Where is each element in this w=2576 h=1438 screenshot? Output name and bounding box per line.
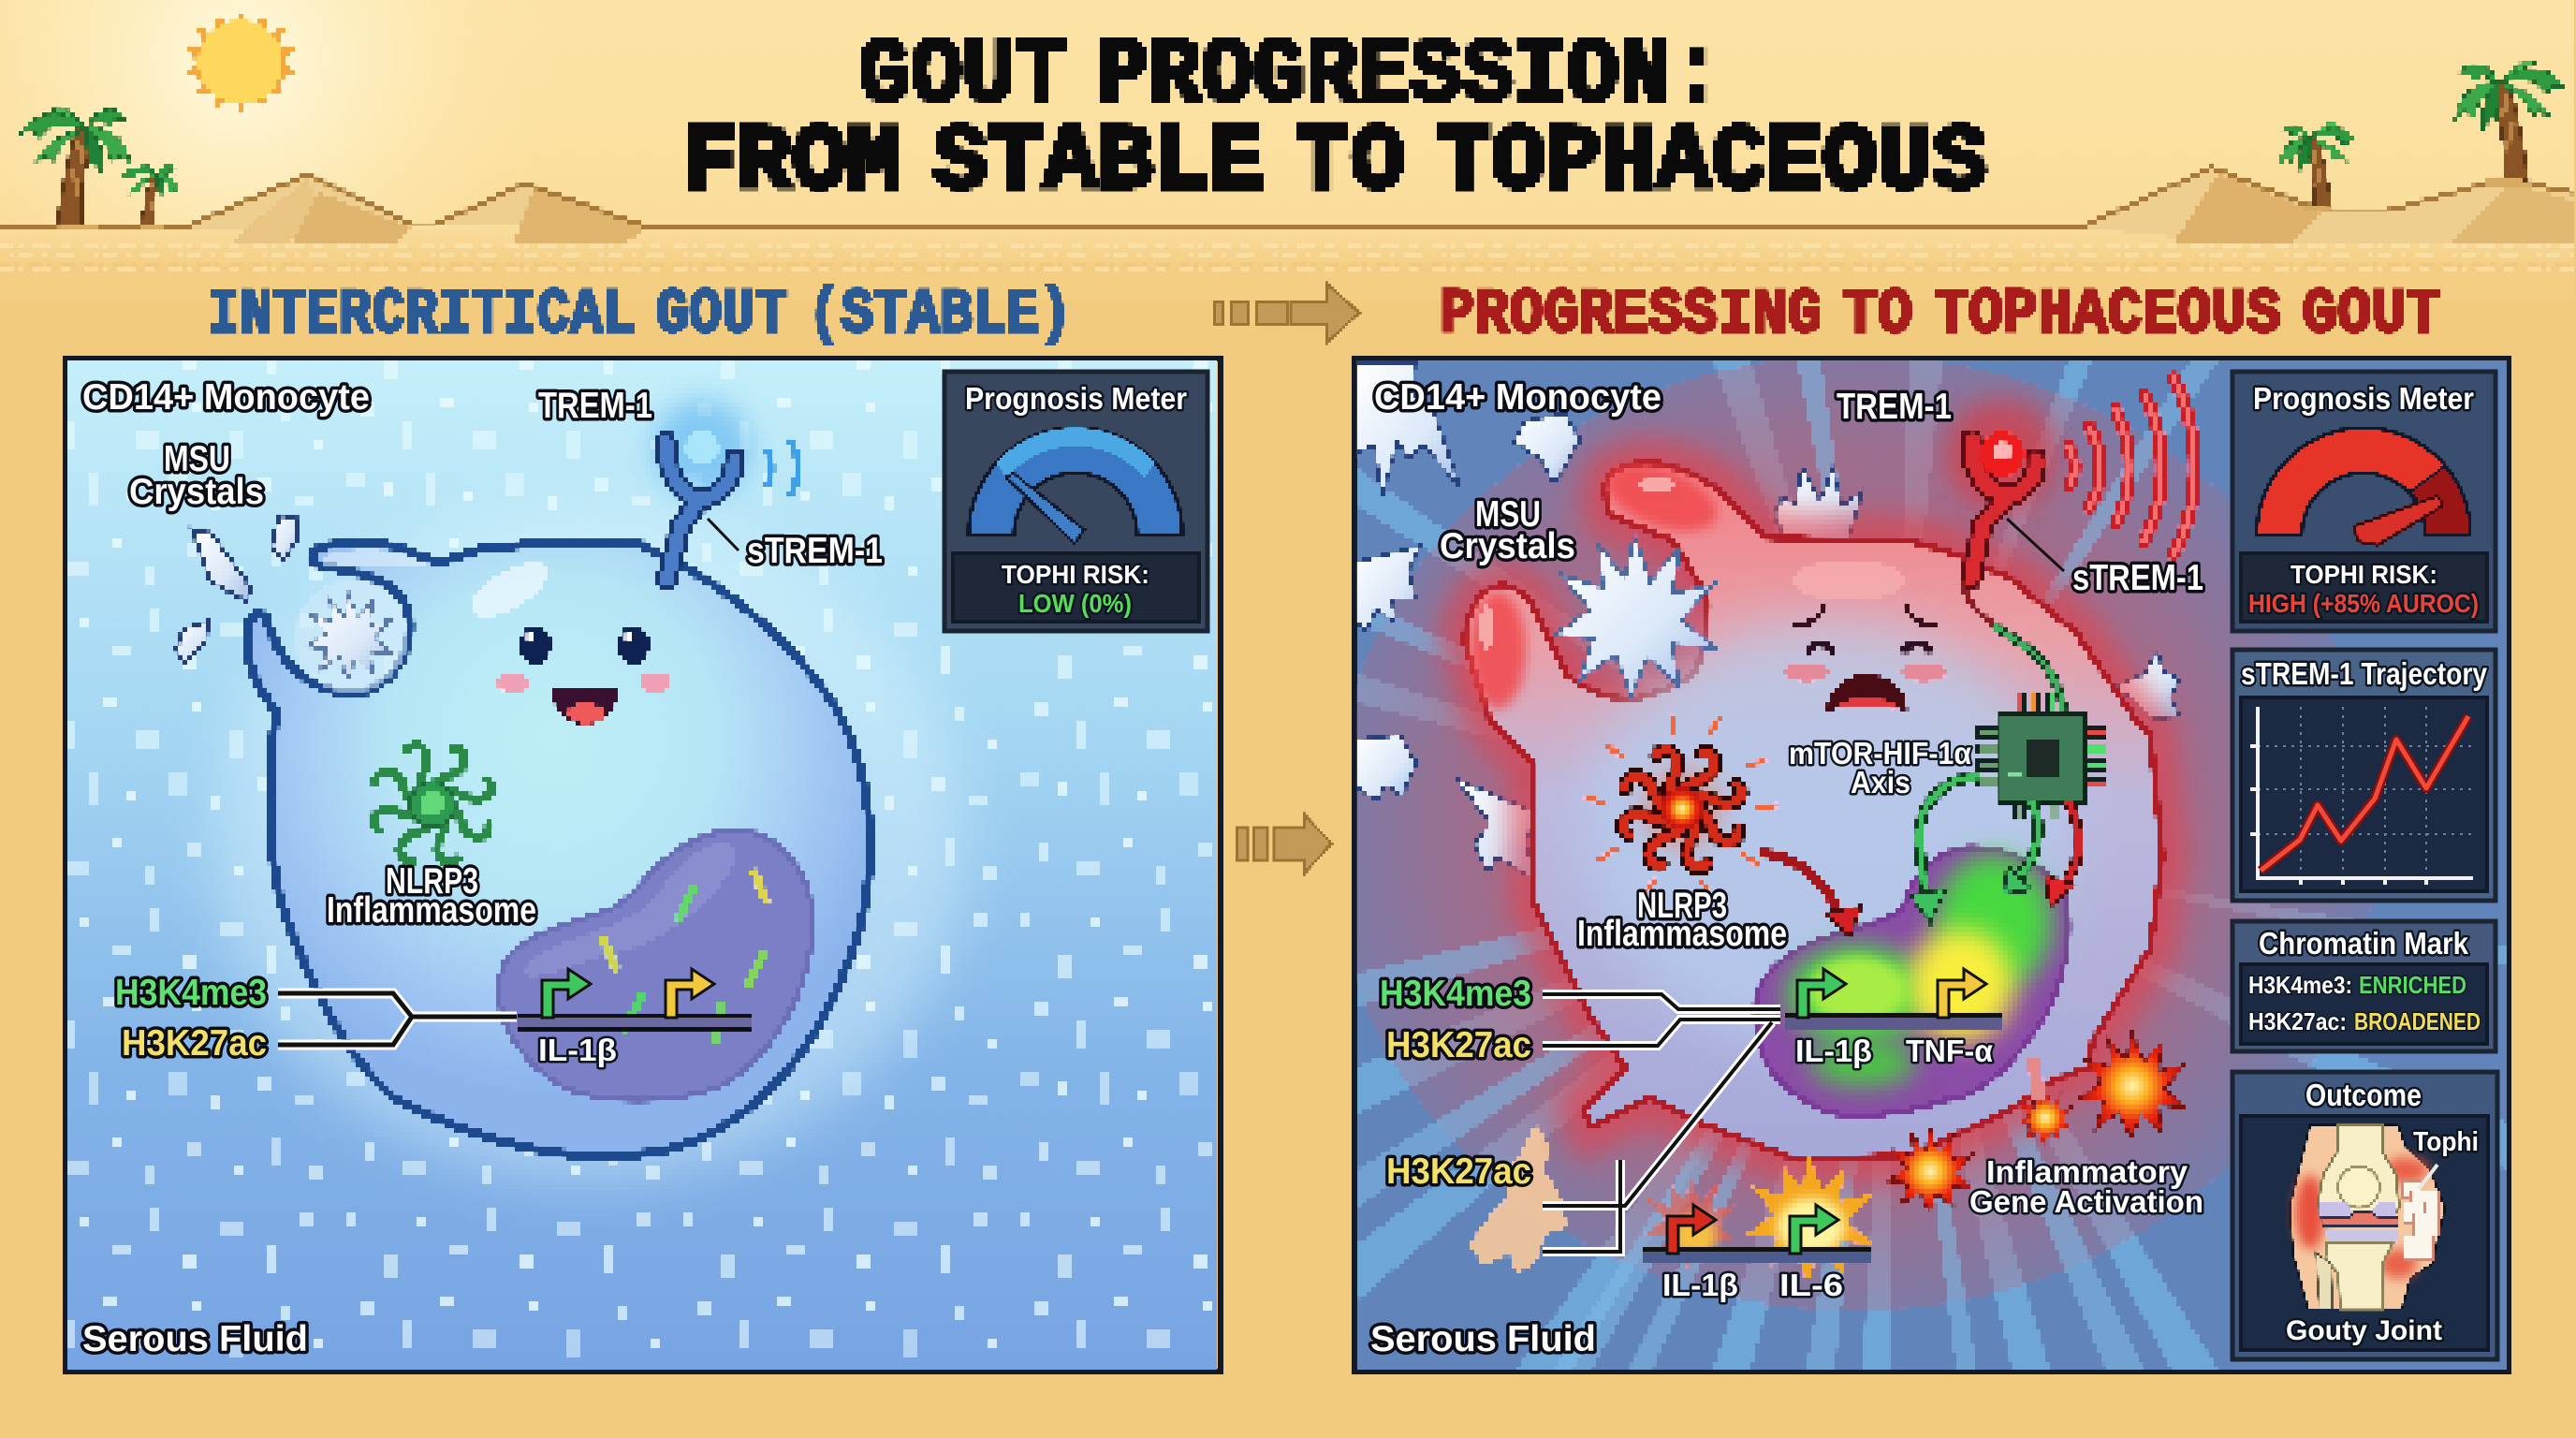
chromatin readout: H3K4me3: bbox=[2248, 971, 2352, 999]
panel: prognosis meter low bbox=[944, 372, 1208, 631]
splash: leaking cytoplasm bbox=[1469, 1123, 1567, 1274]
panel: chromatin mark bbox=[2232, 921, 2496, 1051]
label: H3K4me3: H3K4me3 bbox=[1380, 974, 1531, 1014]
background MSU crystals bbox=[1356, 362, 2179, 880]
gene track: IL-1β and IL-6: IL-1β bbox=[1662, 1268, 1738, 1302]
chromatin title: Chromatin Mark bbox=[2259, 926, 2469, 961]
panel: prognosis meter high bbox=[2232, 372, 2496, 631]
icon: NLRP3 inflammasome bbox=[370, 741, 495, 867]
starburst rays bbox=[1356, 360, 2507, 1370]
phagocytosed crystal bbox=[295, 580, 407, 693]
label: sTREM-1 with leader: sTREM-1 bbox=[2072, 558, 2203, 598]
risk readout bbox=[2241, 553, 2487, 622]
label: H3K27ac: H3K27ac bbox=[122, 1023, 267, 1064]
title: GOUT PROGRESSION: bbox=[858, 24, 1723, 128]
MSU crystals bbox=[176, 515, 298, 663]
icon: gouty joint bbox=[2290, 1125, 2445, 1309]
trajectory title: sTREM-1 Trajectory bbox=[2241, 656, 2488, 691]
label: TREM-1: TREM-1 bbox=[538, 386, 652, 426]
gene track: IL-1β and IL-6 bbox=[1643, 1205, 1871, 1302]
chromatin readout: ENRICHED bbox=[2359, 971, 2466, 999]
histone connectors bbox=[1543, 994, 1780, 1252]
joint inset bbox=[2241, 1116, 2488, 1350]
risk readout: LOW (0%) bbox=[1018, 589, 1132, 618]
label: NLRP3 Inflammasome bbox=[1577, 886, 1787, 954]
monocyte cell bbox=[246, 541, 870, 1156]
desert header scene bbox=[0, 0, 2576, 298]
label: NLRP3 Inflammasome bbox=[327, 861, 536, 931]
receptor bbox=[653, 399, 798, 580]
label: Tophi: Tophi bbox=[2413, 1127, 2479, 1157]
label: NLRP3 Inflammasome: NLRP3 bbox=[386, 861, 478, 902]
label: MSU Crystals: Crystals bbox=[129, 472, 264, 512]
label: CD14+ Monocyte: CD14+ Monocyte bbox=[82, 377, 370, 418]
label: CD14+ Monocyte: CD14+ Monocyte bbox=[1374, 377, 1661, 418]
cell halo bbox=[215, 506, 964, 1180]
gene track: IL-1β and IL-6: IL-6 bbox=[1779, 1268, 1843, 1302]
prognosis title: Prognosis Meter bbox=[2253, 381, 2474, 416]
phagocytosed crystal bbox=[1555, 536, 1714, 696]
outcome title: Outcome bbox=[2305, 1078, 2422, 1112]
label: mTOR-HIF-1α Axis: Axis bbox=[1851, 765, 1910, 800]
label: mTOR-HIF-1α Axis: mTOR-HIF-1α bbox=[1789, 736, 1971, 770]
line chart bbox=[2241, 697, 2487, 891]
prognosis title: Prognosis Meter bbox=[965, 381, 1187, 416]
icon: mTOR chip bbox=[1977, 693, 2105, 820]
risk readout: TOPHI RISK: bbox=[1002, 560, 1149, 589]
heading: left stage: INTERCRITICAL GOUT (STABLE) bbox=[207, 279, 1072, 351]
label: Serous Fluid: Serous Fluid bbox=[1370, 1319, 1596, 1359]
gene track: IL-1β and TNF-α bbox=[1785, 969, 2002, 1068]
label: Inflammatory Gene Activation bbox=[1969, 1154, 2203, 1219]
icon: NLRP3 active bbox=[1587, 715, 1776, 899]
histone connectors bbox=[278, 993, 517, 1045]
label: Tophi bbox=[2413, 1127, 2479, 1189]
arrow: NLRP3 to nucleus bbox=[1760, 853, 1861, 936]
nucleus bbox=[499, 829, 812, 1100]
monocyte cell bbox=[1465, 452, 2162, 1160]
arrows: chip to nucleus bbox=[1910, 776, 2079, 923]
chromatin readout bbox=[2241, 964, 2487, 1044]
panel: sTREM-1 trajectory bbox=[2232, 650, 2496, 901]
heading: right stage: PROGRESSING TO TOPHACEOUS GOUT bbox=[1440, 279, 2441, 351]
label: Inflammatory Gene Activation: Inflammatory bbox=[1986, 1154, 2188, 1189]
gauge bbox=[2257, 428, 2470, 545]
label: sTREM-1 with leader bbox=[708, 519, 883, 571]
panel: intercritical gout bbox=[66, 359, 1221, 1372]
panel frame bbox=[66, 359, 1221, 1372]
label: NLRP3 Inflammasome: Inflammasome bbox=[327, 890, 536, 931]
label: sTREM-1 with leader: sTREM-1 bbox=[747, 531, 883, 571]
risk readout: TOPHI RISK: bbox=[2291, 560, 2437, 589]
label: H3K27ac: H3K27ac bbox=[1386, 1025, 1531, 1065]
label: mTOR-HIF-1α Axis bbox=[1789, 736, 1971, 800]
label: sTREM-1 with leader bbox=[2007, 519, 2203, 598]
risk readout: HIGH (+85% AUROC) bbox=[2248, 589, 2479, 618]
label: MSU Crystals: Crystals bbox=[1440, 526, 1575, 566]
label: IL-1β: IL-1β bbox=[538, 1033, 617, 1067]
dunes bbox=[0, 168, 2576, 245]
icon: sun bbox=[185, 11, 296, 112]
label: TREM-1: TREM-1 bbox=[1837, 387, 1952, 427]
icon: palm trees bbox=[22, 61, 2564, 230]
label: H3K27ac lower: H3K27ac bbox=[1386, 1152, 1531, 1192]
secondary promoter glows bbox=[1644, 1155, 1872, 1283]
nucleus with chromatin activation bbox=[1755, 847, 2069, 1116]
panel: outcome bbox=[2232, 1072, 2497, 1359]
label: MSU Crystals: MSU bbox=[164, 439, 230, 479]
risk readout bbox=[953, 553, 1199, 622]
gauge bbox=[969, 428, 1182, 543]
face: happy bbox=[497, 625, 671, 726]
signal wire bbox=[1961, 582, 2064, 712]
chromatin readout: BROADENED bbox=[2354, 1007, 2481, 1035]
inflammatory bursts bbox=[1888, 1032, 2187, 1213]
label: NLRP3 Inflammasome: NLRP3 bbox=[1637, 886, 1727, 926]
label: Serous Fluid: Serous Fluid bbox=[82, 1319, 308, 1359]
face: distressed bbox=[1784, 604, 1947, 713]
label: Gouty Joint: Gouty Joint bbox=[2286, 1315, 2442, 1346]
title bbox=[681, 24, 1987, 215]
arrow: top progression bbox=[1214, 285, 1359, 342]
receptor and signal waves bbox=[1946, 378, 2194, 579]
label: H3K4me3: H3K4me3 bbox=[115, 973, 267, 1013]
label: MSU Crystals bbox=[129, 439, 264, 512]
panel: progressing to tophaceous gout bbox=[1329, 356, 2509, 1372]
gene track: IL-1β and TNF-α: IL-1β bbox=[1795, 1034, 1872, 1068]
cell halo bbox=[1465, 462, 2162, 1160]
gene track: IL-1β bbox=[518, 969, 752, 1067]
label: Inflammatory Gene Activation: Gene Activation bbox=[1969, 1184, 2203, 1219]
gene track: IL-1β and TNF-α: TNF-α bbox=[1906, 1034, 1993, 1068]
label: NLRP3 Inflammasome: Inflammasome bbox=[1577, 914, 1787, 954]
panel frame bbox=[1354, 359, 2509, 1372]
label: MSU Crystals bbox=[1440, 494, 1575, 566]
label: MSU Crystals: MSU bbox=[1475, 494, 1541, 535]
arrow: middle progression bbox=[1237, 815, 1331, 873]
title: FROM STABLE TO TOPHACEOUS bbox=[681, 111, 1987, 215]
chromatin readout: H3K27ac: bbox=[2248, 1007, 2347, 1035]
